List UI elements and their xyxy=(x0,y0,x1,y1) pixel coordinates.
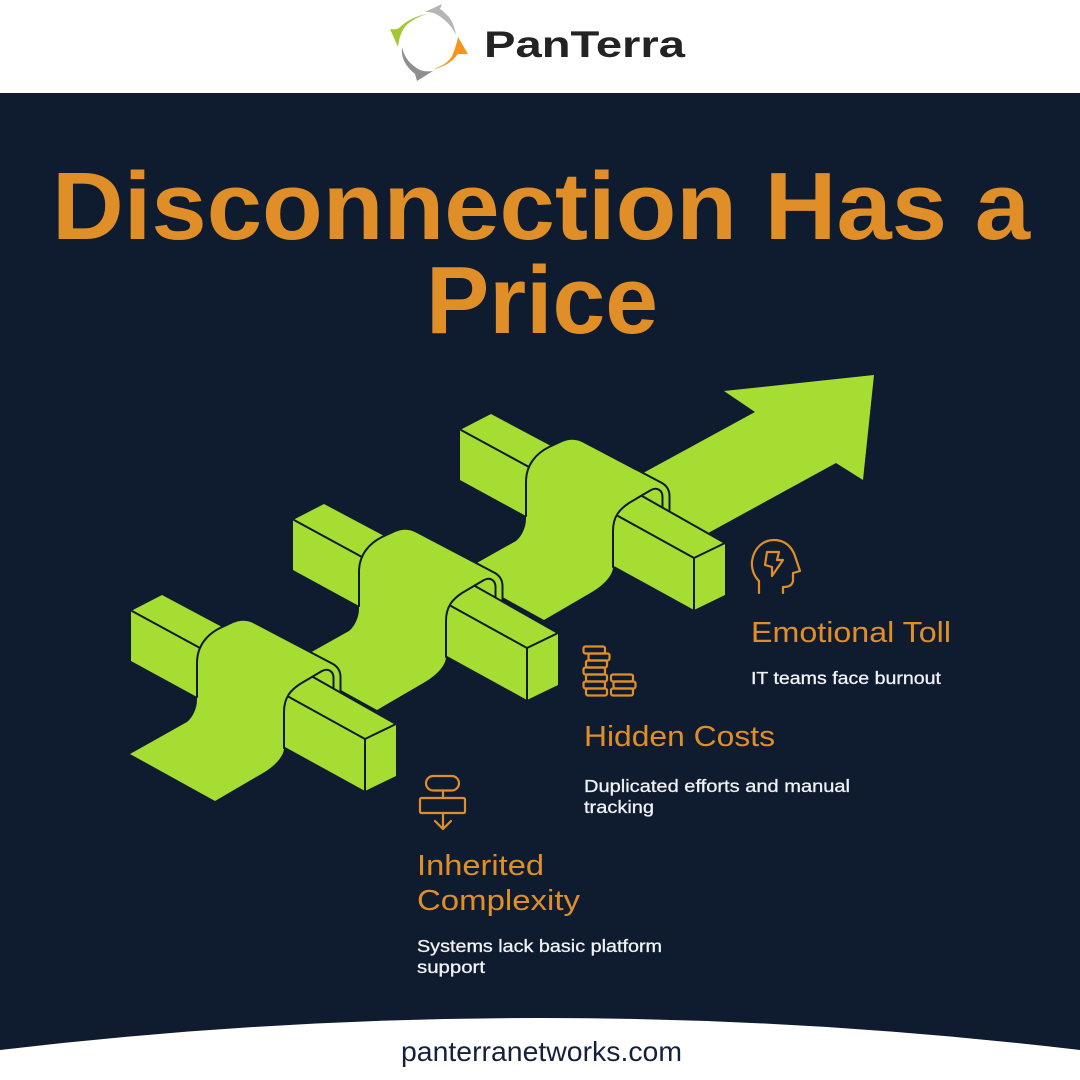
icon: stacked coins xyxy=(584,646,636,696)
callout: hidden costs: Hidden Costs xyxy=(584,721,775,753)
callout: emotional toll xyxy=(751,617,951,688)
icon: PanTerra logo ring xyxy=(390,4,468,81)
callout: hidden costs: tracking xyxy=(584,797,654,817)
callout: hidden costs xyxy=(584,721,850,817)
header band with logo xyxy=(0,0,1080,93)
title: Price xyxy=(426,247,658,354)
callout: inherited complexity: Inherited xyxy=(417,850,544,882)
icon: head with lightning bolt xyxy=(752,540,800,593)
isometric step 2: hidden costs barrier xyxy=(292,504,558,710)
callout: hidden costs: Duplicated efforts and manual xyxy=(584,776,850,796)
callout: inherited complexity: Complexity xyxy=(417,885,581,917)
callout: inherited complexity: Systems lack basic platform xyxy=(417,936,662,956)
isometric step 1: inherited complexity barrier xyxy=(130,595,396,801)
callout: emotional toll: IT teams face burnout xyxy=(751,668,941,688)
callout: inherited complexity xyxy=(417,850,662,977)
footer curve with website xyxy=(0,1018,1080,1080)
icon: flowchart xyxy=(420,776,465,829)
callout: emotional toll: Emotional Toll xyxy=(751,617,951,649)
arrow: rising green path head xyxy=(600,375,874,570)
title xyxy=(52,153,1031,354)
footer curve with website: panterranetworks.com xyxy=(401,1036,682,1067)
logo wordmark: PanTerra xyxy=(484,24,686,65)
title: Disconnection Has a xyxy=(52,153,1031,260)
isometric step 3: emotional toll barrier xyxy=(459,414,725,620)
callout: inherited complexity: support xyxy=(417,957,485,977)
